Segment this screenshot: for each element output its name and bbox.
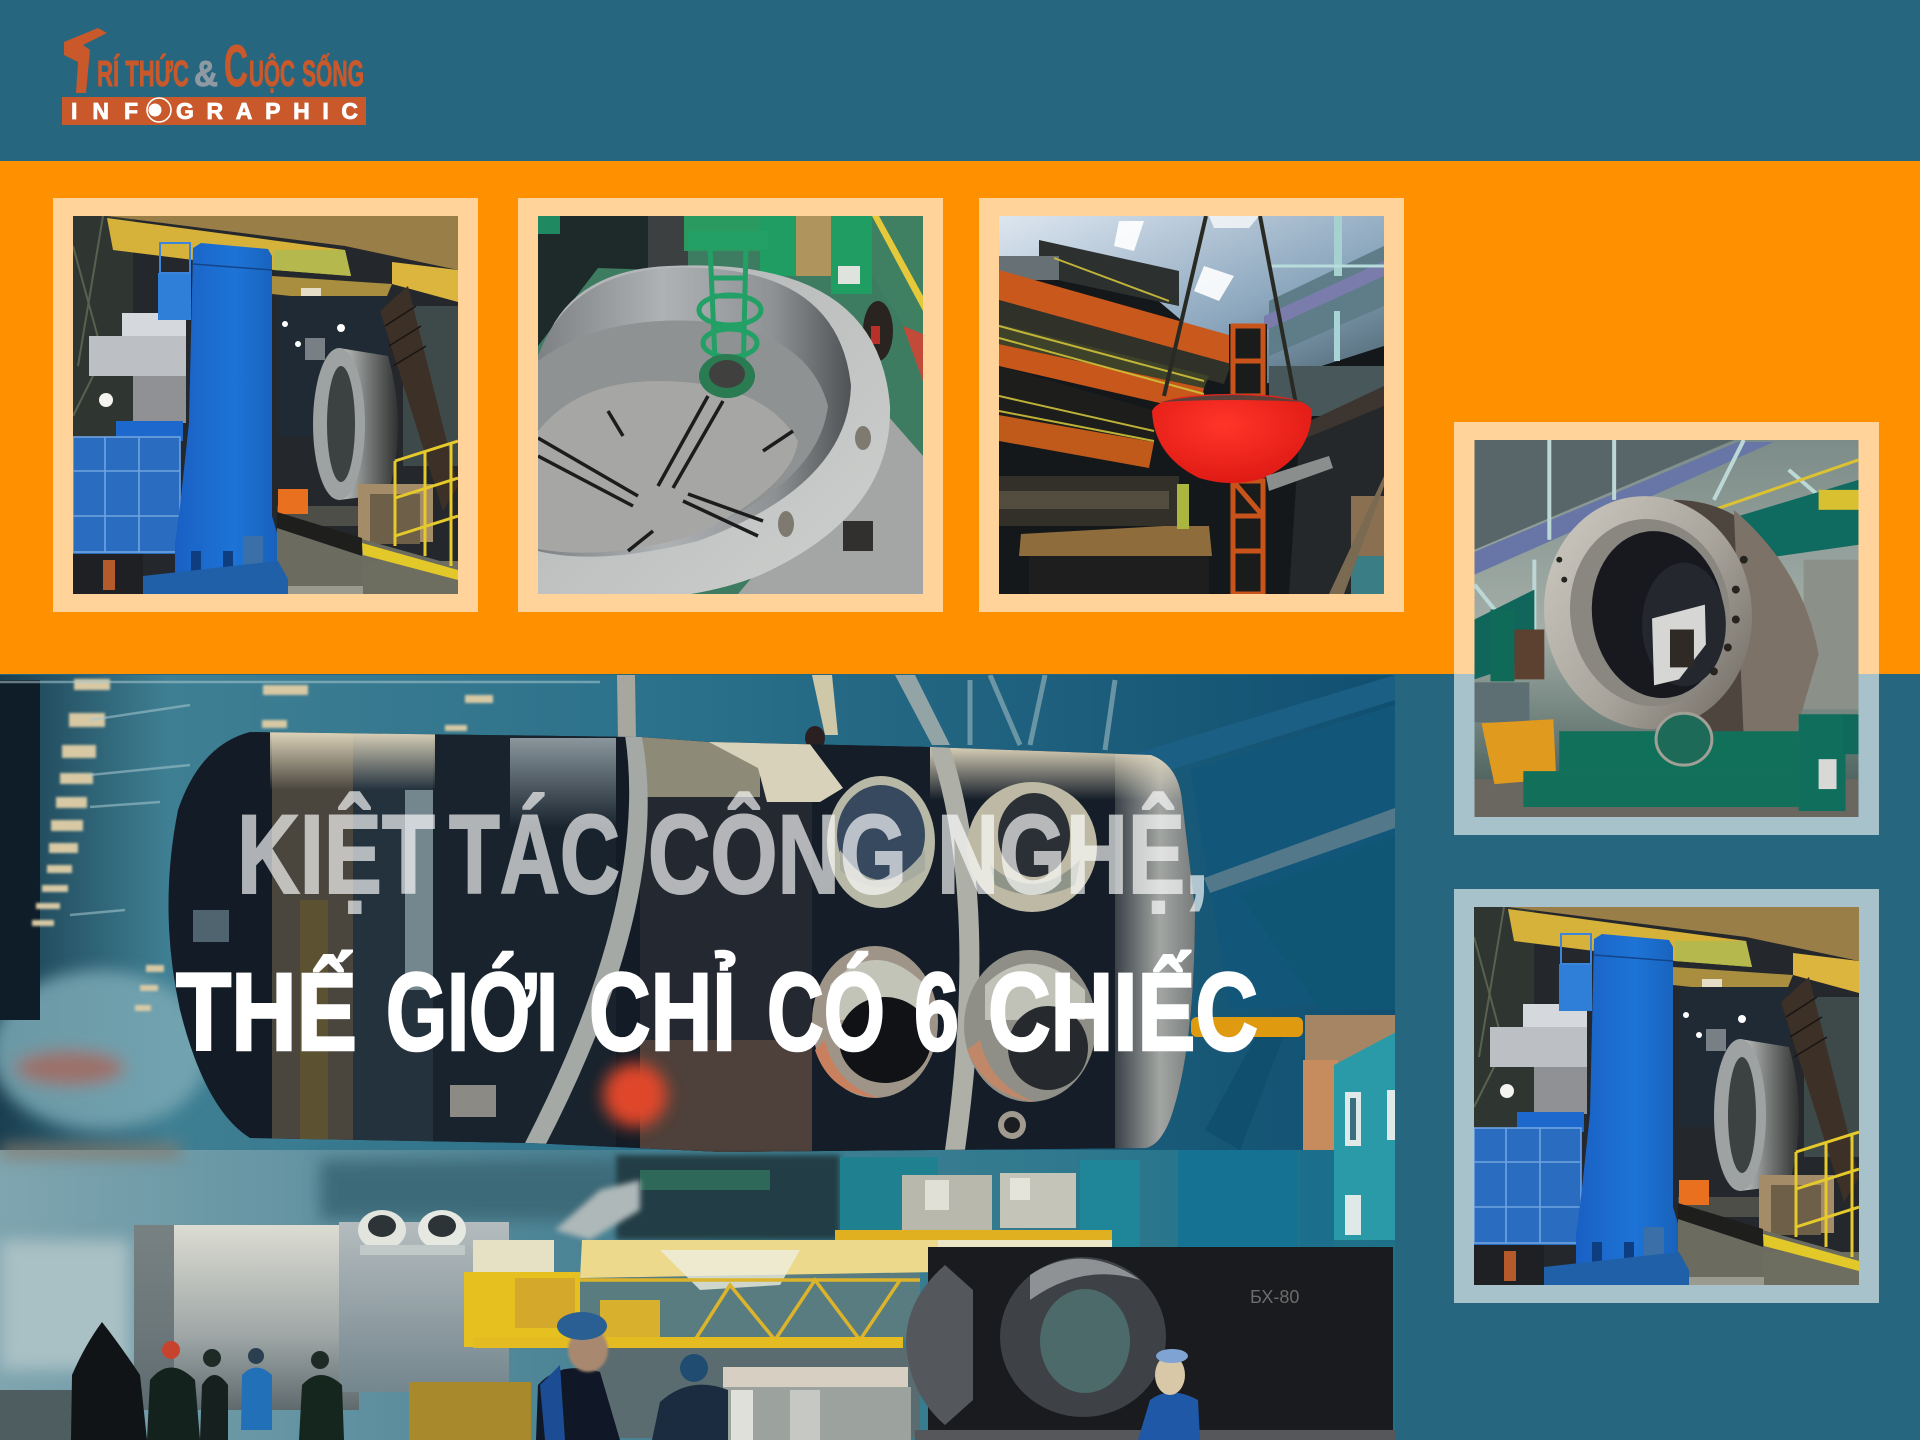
- background machinery: [555, 1150, 1298, 1250]
- title line 1: TÁC: [449, 792, 620, 917]
- dark vessel section with nozzle: БХ-80: [1250, 1287, 1299, 1307]
- title line 2: CHỈ: [589, 951, 736, 1074]
- photo: steel vessel on green stand: [1474, 440, 1859, 817]
- orange photo band: [0, 161, 1920, 674]
- dark vessel section with nozzle: [906, 1247, 1395, 1440]
- title line 2: CHIẾC: [988, 951, 1258, 1074]
- panel: photo 1 boring machine: [53, 198, 478, 612]
- panel: photo 3 glowing forging: [979, 198, 1404, 612]
- title line 1: NGHỆ,: [937, 792, 1209, 917]
- logo wordmark: &: [194, 53, 218, 94]
- title line 2: [176, 951, 1258, 1074]
- title line 1: CÔNG: [648, 792, 907, 917]
- title line 2: GIỚI: [386, 951, 558, 1074]
- infographic ribbon: GRAPHIC: [176, 98, 358, 124]
- title line 2: THẾ: [176, 951, 357, 1074]
- panel: photo 2 machined ring: [518, 198, 943, 612]
- yellow scaffold machinery: [409, 1230, 1112, 1440]
- photo: red hot dome on chains: [999, 216, 1384, 594]
- main reactor vessel: [150, 720, 1210, 1165]
- title: [176, 792, 1258, 1074]
- top header band: [0, 0, 1920, 161]
- title line 1: KIỆT: [237, 792, 435, 917]
- vessel nozzles: [812, 776, 1097, 1139]
- crane slings: [617, 675, 950, 750]
- logo wordmark: C: [224, 34, 248, 99]
- hall background: [0, 675, 1400, 1440]
- photo: blue column and forged ring: [73, 216, 458, 594]
- panel: photo 5 repeat of boring machine: [1454, 889, 1879, 1303]
- title line 2: 6: [914, 951, 959, 1074]
- infographic ribbon: [62, 97, 366, 125]
- infographic ribbon: INF: [71, 98, 138, 124]
- photo: steel ring from above: [538, 216, 923, 594]
- lower vessel: [134, 1210, 509, 1410]
- icon: T mark: [64, 28, 107, 93]
- title line 2: CÓ: [767, 951, 885, 1074]
- workers: [0, 1312, 1200, 1440]
- panel: photo 4 reactor vessel section: [1454, 422, 1879, 835]
- logo wordmark: UỘC: [249, 52, 295, 94]
- logo wordmark: [97, 34, 364, 99]
- logo wordmark: RÍ THỨC: [97, 52, 189, 94]
- logo wordmark: SỐNG: [302, 52, 364, 94]
- orange crossbar: [1191, 1017, 1303, 1037]
- logo: Tri thuc & Cuoc song Infographic: [62, 28, 366, 125]
- title line 1: [237, 792, 1209, 917]
- photo: blue column and forged ring (repeat): [1474, 907, 1859, 1285]
- hero photo with title: [0, 675, 1395, 1440]
